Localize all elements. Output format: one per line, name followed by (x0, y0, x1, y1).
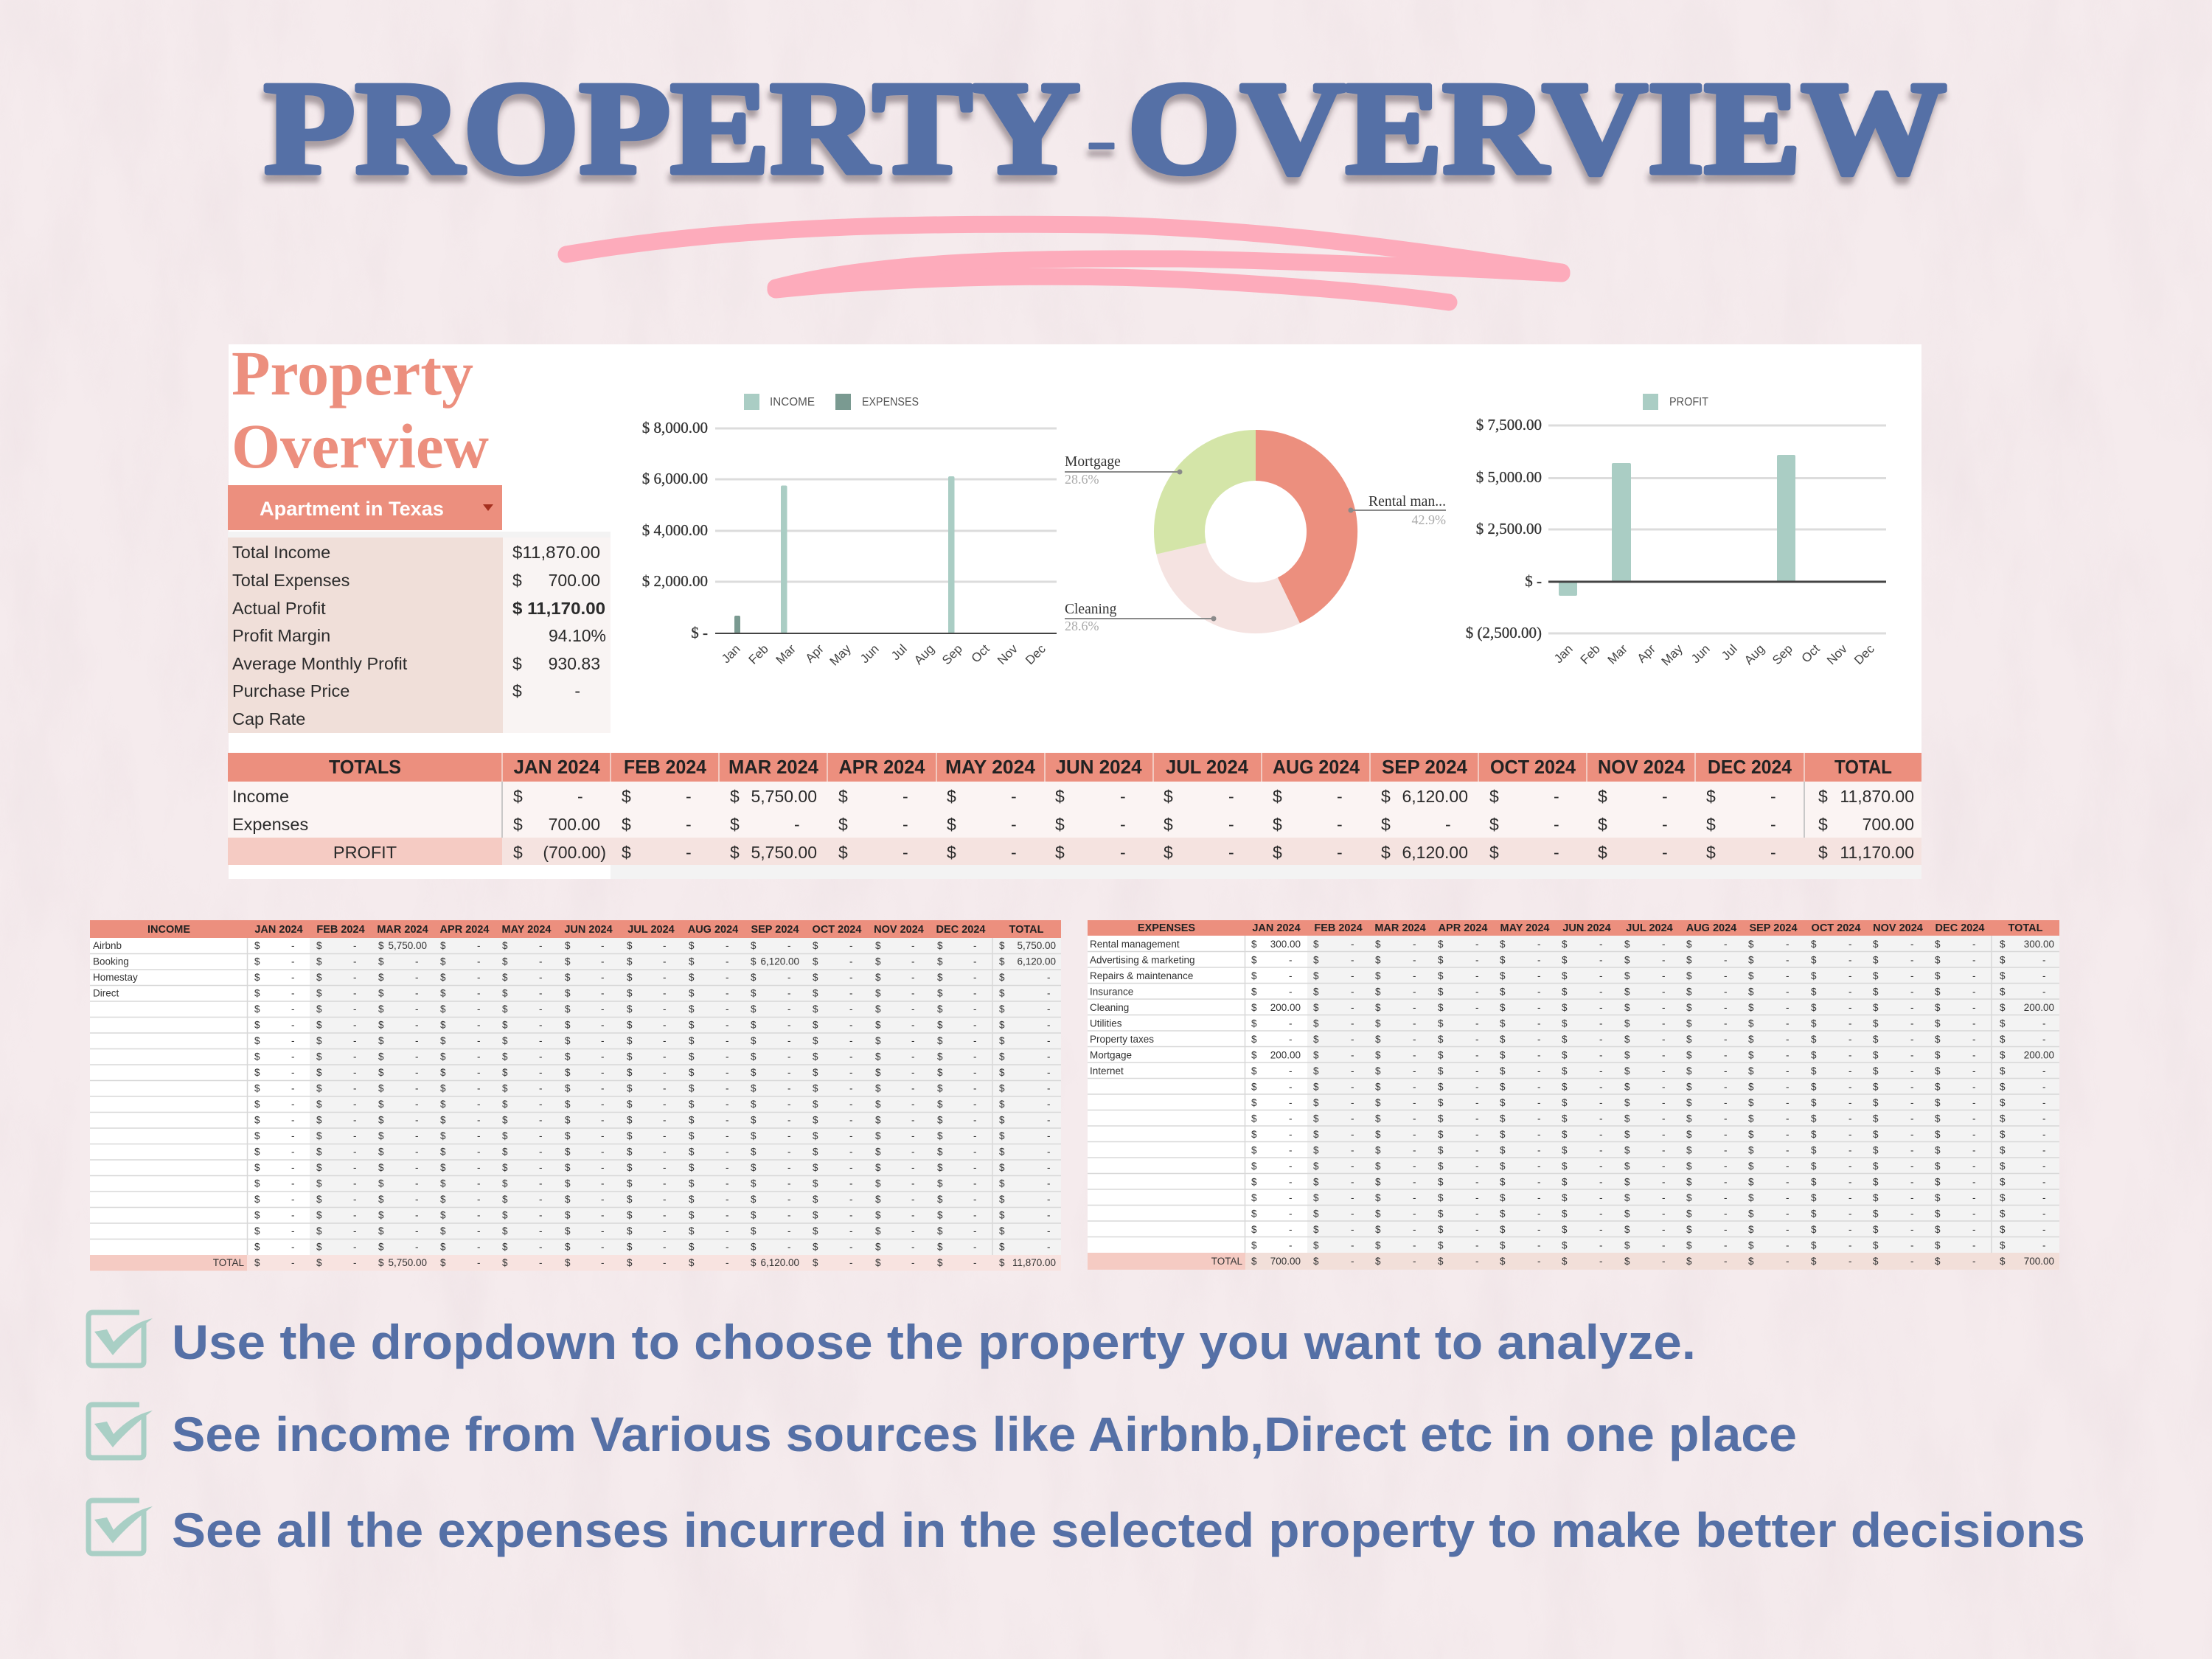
label: Cleaning: 28.6% (1065, 619, 1099, 633)
currency cells: $$-$-$-$-$-$-$-$-$-$-$-$ (1251, 939, 2006, 950)
row: income: 6,120.00 (1402, 787, 1468, 806)
currency cells: $-$-$-$-$-$-$-$-$-$-$-$-$- (1251, 1192, 2045, 1203)
currency cells: 5,750.00 (388, 1257, 427, 1268)
row labels: Utilities (1090, 1018, 1122, 1029)
header row: OCT 2024 (813, 924, 861, 936)
title: OVERVIEW (1127, 55, 1947, 201)
bar chart: profit: $ (2,500.00) (1466, 624, 1542, 641)
currency cells: 700.00 (2024, 1256, 2054, 1267)
row labels: Booking (93, 956, 129, 967)
header row (1138, 922, 2043, 934)
currency cells: $-$-$-$-$-$-$-$-$-$-$-$-$- (1251, 1018, 2045, 1029)
header row: NOV 2024 (874, 924, 924, 936)
bar chart: profit: $ 7,500.00 (1476, 416, 1542, 434)
row labels: Airbnb (93, 940, 122, 951)
bar chart: income vs expenses: Jun (858, 641, 882, 666)
bar chart: profit: Nov (1824, 641, 1850, 667)
row: profit: 6,120.00 (1402, 843, 1468, 862)
currency cells: $-$-$-$-$-$-$-$-$-$-$-$-$- (254, 1035, 1050, 1046)
header row: SEP 2024 (751, 924, 799, 936)
header row: TOTAL (2008, 922, 2043, 934)
donut chart: expenses breakdown (1065, 430, 1446, 633)
bar chart: profit: Oct (1799, 641, 1823, 666)
currency cells: $-$-$-$-$-$-$-$-$-$-$-$-$- (1251, 970, 2045, 981)
legend (1643, 394, 1708, 410)
header row: TOTAL (1009, 924, 1044, 936)
currency cells: $-$-$$-$-$-$-$-$$-$-$-$ (254, 1257, 1005, 1268)
currency cells: $-$-$-$-$-$-$-$-$-$-$-$-$- (1251, 1113, 2045, 1124)
header row: AUG 2024 (1686, 922, 1736, 934)
row: profit: 11,170.00 (1840, 843, 1914, 862)
currency cells: $-$-$-$-$-$-$-$-$-$-$-$-$- (1251, 1208, 2045, 1220)
row: profit: (700.00) (543, 843, 606, 862)
bar chart: profit: Jan (1551, 641, 1576, 666)
dropdown: Apartment in Texas (228, 485, 502, 530)
summary KPI table: $ (512, 654, 522, 673)
currency cells: $-$-$-$-$-$-$-$-$-$-$-$-$- (254, 988, 1050, 998)
header row: FEB 2024 (316, 924, 365, 936)
row labels: TOTAL (1211, 1256, 1242, 1267)
summary KPI table: $11,870.00 (512, 543, 600, 562)
row labels: Property taxes (1090, 1034, 1154, 1045)
header row: JUN 2024 (564, 924, 613, 936)
bullet 1: dropdown: Use the dropdown to choose the property you want to analyze. (172, 1315, 1696, 1369)
header row: MAY 2024 (945, 756, 1036, 778)
decorative pink underline swoosh (566, 224, 1562, 302)
row: income: Income (232, 787, 289, 806)
bar chart: income vs expenses: Oct (969, 641, 992, 666)
header row: EXPENSES (1138, 922, 1195, 934)
row labels: Internet (1090, 1065, 1124, 1077)
currency cells: $-$-$-$-$-$-$-$-$-$-$-$-$- (1251, 1240, 2045, 1251)
label: Rental management: Rental man... (1368, 494, 1446, 509)
currency cells: $-$-$-$-$-$-$-$-$-$-$-$-$- (1251, 1081, 2045, 1093)
row labels: Advertising & marketing (1090, 954, 1195, 966)
row labels: Repairs & maintenance (1090, 970, 1193, 981)
header row: MAR 2024 (377, 924, 428, 936)
icon: checkbox (88, 1500, 153, 1554)
bar chart: profit: $ - (1525, 572, 1542, 590)
bar chart: profit: Mar (1605, 641, 1630, 667)
currency cells: $-$-$-$-$-$-$-$-$-$-$-$-$- (254, 1051, 1050, 1062)
row labels: TOTAL (213, 1257, 244, 1268)
header row: MAY 2024 (502, 924, 551, 936)
bar chart: income vs expenses: Sep (939, 641, 965, 667)
row labels: Homestay (93, 972, 138, 983)
row: income: 11,870.00 (1840, 787, 1914, 806)
header row: DEC 2024 (936, 924, 985, 936)
bar chart: income vs expenses (642, 394, 1057, 669)
currency cells (254, 940, 1056, 1268)
header row: JAN 2024 (254, 924, 303, 936)
row: income: $-$-$$-$-$-$-$-$$-$-$-$ (513, 787, 1828, 806)
header row: MAY 2024 (1500, 922, 1549, 934)
row: expenses: 700.00 (1863, 815, 1914, 834)
currency cells: 200.00 (2024, 1002, 2054, 1013)
legend: EXPENSES (862, 396, 919, 408)
header row: OCT 2024 (1812, 922, 1860, 934)
currency cells: $-$-$$-$-$-$-$-$-$-$-$-$ (254, 940, 1005, 951)
header row: JUN 2024 (1562, 922, 1611, 934)
currency cells: 200.00 (1270, 1050, 1301, 1060)
header row: TOTALS (329, 756, 401, 778)
title: PROPERTY (264, 55, 1080, 201)
currency cells: $-$-$-$-$-$-$-$-$-$-$-$-$- (1251, 1129, 2045, 1140)
row: expenses: 700.00 (549, 815, 600, 834)
summary KPI table: $ (512, 571, 522, 590)
currency cells: $-$-$-$-$-$-$-$-$-$-$-$-$- (254, 1082, 1050, 1094)
currency cells: 200.00 (1270, 1002, 1301, 1013)
header row: APR 2024 (1439, 922, 1487, 934)
bar chart: income vs expenses: Feb (746, 641, 771, 667)
bar chart: profit: Feb (1578, 641, 1603, 667)
currency cells: 6,120.00 (1017, 956, 1056, 967)
currency cells: $-$-$-$-$-$-$-$-$-$-$-$-$- (1251, 1161, 2045, 1172)
header row: JUL 2024 (1166, 756, 1249, 778)
label: Cleaning: Cleaning (1065, 602, 1117, 617)
currency cells: $-$-$-$-$-$-$-$-$-$-$-$-$- (254, 1209, 1050, 1221)
bar chart: profit: May (1659, 641, 1686, 669)
header row: NOV 2024 (1598, 756, 1686, 778)
header row: APR 2024 (839, 756, 925, 778)
currency cells: $-$-$-$-$-$-$-$-$-$-$-$-$- (254, 1146, 1050, 1158)
row labels: Insurance (1090, 987, 1133, 997)
row labels (1090, 939, 1242, 1267)
header row: JUN 2024 (1055, 756, 1142, 778)
bar chart: income vs expenses: Dec (1023, 641, 1048, 667)
row labels: Direct (93, 988, 119, 998)
summary KPI table: 94.10% (549, 626, 606, 645)
row: expenses: Expenses (232, 815, 308, 834)
legend: PROFIT (1669, 396, 1708, 408)
bar chart: income vs expenses: May (827, 641, 854, 669)
summary KPI table: 930.83 (549, 654, 600, 673)
currency cells: 200.00 (2024, 1050, 2054, 1060)
bar chart: profit: $ 2,500.00 (1476, 520, 1542, 538)
summary KPI table: Purchase Price (232, 681, 349, 700)
header row: INCOME (147, 924, 190, 936)
header row (147, 924, 1044, 936)
bar chart: profit: Apr (1635, 641, 1658, 666)
header row: MAR 2024 (728, 756, 819, 778)
summary KPI table: Profit Margin (232, 626, 330, 645)
currency cells: $-$-$-$-$-$-$-$-$-$-$-$-$- (1251, 1177, 2045, 1187)
currency cells: 11,870.00 (1012, 1257, 1056, 1268)
label: Mortgage: Mortgage (1065, 454, 1121, 470)
row labels: Mortgage (1090, 1050, 1132, 1060)
label: Mortgage: 28.6% (1065, 472, 1099, 487)
panel: dashboard sheet (228, 338, 1921, 879)
heading: Property Overview: Property (232, 338, 473, 408)
header row: AUG 2024 (688, 924, 738, 936)
currency cells: $-$-$-$-$-$-$-$-$-$-$-$-$- (254, 1242, 1050, 1252)
currency cells: $-$-$-$-$-$-$-$-$-$-$-$-$- (254, 1225, 1050, 1237)
bar chart: profit (1466, 394, 1886, 669)
currency cells: $-$-$-$-$-$-$-$-$-$-$-$-$- (1251, 1144, 2045, 1156)
currency cells: 5,750.00 (388, 940, 427, 951)
header row: AUG 2024 (1273, 756, 1360, 778)
row: expenses: $$-$-$-$-$-$-$-$-$-$-$-$ (513, 815, 1828, 834)
currency cells: $-$-$-$-$-$-$-$-$-$-$-$-$- (254, 1099, 1050, 1110)
row: profit: $$-$$-$-$-$-$-$$-$-$-$ (513, 843, 1828, 862)
bar chart: income vs expenses: $ 8,000.00 (642, 419, 708, 437)
header row: DEC 2024 (1708, 756, 1792, 778)
row labels: Rental management (1090, 939, 1180, 950)
row: income: 5,750.00 (751, 787, 817, 806)
summary KPI table: $ (512, 681, 522, 700)
header row: FEB 2024 (1314, 922, 1363, 934)
header row: DEC 2024 (1935, 922, 1984, 934)
header row: JAN 2024 (1252, 922, 1301, 934)
summary KPI table: Actual Profit (232, 599, 326, 618)
heading: Property Overview (232, 338, 489, 481)
currency cells: $$-$-$-$-$-$-$-$-$-$-$-$ (1251, 1050, 2006, 1060)
bar chart: income vs expenses: Nov (995, 641, 1020, 667)
bar chart: profit: Sep (1770, 641, 1795, 667)
header row: FEB 2024 (624, 756, 707, 778)
currency cells: $-$-$-$-$-$-$-$-$-$-$-$-$- (254, 1019, 1050, 1031)
currency cells: 5,750.00 (1017, 940, 1056, 951)
summary KPI table: Total Expenses (232, 571, 349, 590)
header row: TOTAL (1834, 756, 1892, 778)
currency cells: $-$-$-$-$-$-$-$-$-$-$-$-$- (254, 1130, 1050, 1141)
header row: JAN 2024 (513, 756, 600, 778)
header row: APR 2024 (440, 924, 489, 936)
header row (329, 756, 1892, 778)
currency cells: $-$-$-$-$-$-$-$-$-$-$-$-$- (1251, 987, 2045, 997)
currency cells: $-$-$-$-$-$-$-$-$-$-$-$-$- (1251, 1097, 2045, 1108)
bar chart: profit: Dec (1851, 641, 1877, 667)
currency cells: $$-$-$-$-$-$-$-$-$-$-$-$ (1251, 1256, 2006, 1267)
currency cells: $$-$-$-$-$-$-$-$-$-$-$-$ (1251, 1002, 2006, 1013)
bar chart: income vs expenses: $ 2,000.00 (642, 572, 708, 590)
table: monthly totals (228, 753, 1921, 879)
currency cells: $-$-$-$-$-$-$-$-$-$-$-$-$- (1251, 954, 2045, 966)
bar chart: income vs expenses: $ 4,000.00 (642, 521, 708, 539)
currency cells (1251, 939, 2054, 1267)
bar chart: income vs expenses: Mar (773, 641, 799, 667)
label: Cleaning (1065, 602, 1217, 633)
legend (744, 394, 919, 410)
currency cells: $-$-$-$-$-$-$-$-$-$-$-$-$- (254, 1115, 1050, 1125)
bar chart: profit: Aug (1742, 641, 1767, 667)
header row: NOV 2024 (1873, 922, 1923, 934)
currency cells: 300.00 (2024, 939, 2054, 950)
title (264, 55, 1947, 201)
label: Rental management (1348, 494, 1446, 527)
currency cells: $-$-$-$-$-$-$-$-$-$-$-$-$- (254, 1178, 1050, 1189)
heading: Property Overview: Overview (232, 411, 489, 481)
icon: checkbox (88, 1312, 153, 1366)
summary KPI table: Average Monthly Profit (232, 654, 408, 673)
row labels: Cleaning (1090, 1002, 1129, 1013)
bullet 2: income sources: See income from Various sources like Airbnb,Direct etc in one place (172, 1407, 1797, 1461)
bar chart: profit: Jul (1719, 641, 1740, 663)
currency cells: $-$-$-$-$-$-$-$-$-$-$-$-$- (1251, 1224, 2045, 1235)
currency cells: 6,120.00 (760, 956, 799, 967)
header row: SEP 2024 (1382, 756, 1468, 778)
summary KPI table: 700.00 (549, 571, 600, 590)
bar chart: income vs expenses: $ 6,000.00 (642, 470, 708, 487)
summary KPI table: Total Income (232, 543, 330, 562)
icon: checkbox (88, 1405, 153, 1458)
header row: SEP 2024 (1749, 922, 1798, 934)
currency cells: 6,120.00 (760, 1257, 799, 1268)
currency cells: $-$-$-$-$-$-$-$-$-$-$-$-$- (254, 1004, 1050, 1015)
bar chart: income vs expenses: Jan (719, 641, 743, 666)
bar chart: income vs expenses: Jul (888, 641, 910, 663)
header row: JUL 2024 (627, 924, 675, 936)
label: Mortgage (1065, 454, 1183, 487)
table: expense categories (1088, 920, 2059, 1270)
currency cells: $-$-$-$-$-$-$-$-$-$-$-$-$- (254, 1194, 1050, 1205)
table: income sources (90, 920, 1061, 1271)
summary KPI table (228, 532, 611, 733)
currency cells: $-$-$-$-$-$-$-$-$-$-$-$-$- (1251, 1065, 2045, 1077)
currency cells: 700.00 (1270, 1256, 1301, 1267)
label: Rental management: 42.9% (1411, 512, 1446, 527)
currency cells: $-$-$-$-$-$-$-$-$-$-$-$-$- (254, 1067, 1050, 1078)
header row: OCT 2024 (1490, 756, 1576, 778)
bar chart: profit: $ 5,000.00 (1476, 468, 1542, 486)
bullet 3: expenses: See all the expenses incurred in the selected property to make better decisions (172, 1503, 2085, 1557)
bar chart: income vs expenses: Aug (911, 641, 937, 667)
currency cells: $-$-$-$-$-$-$-$-$-$-$-$-$- (254, 1162, 1050, 1173)
bar chart: profit: Jun (1688, 641, 1713, 666)
row labels (93, 940, 244, 1268)
row: profit: 5,750.00 (751, 843, 817, 862)
summary KPI table: Cap Rate (232, 709, 305, 728)
summary KPI table: $ 11,170.00 (512, 599, 605, 618)
header row: MAR 2024 (1374, 922, 1426, 934)
currency cells: $-$-$-$-$-$-$-$-$$-$-$-$ (254, 956, 1005, 967)
bar chart: income vs expenses: Apr (803, 641, 827, 666)
summary KPI table: - (574, 681, 580, 700)
header row: JUL 2024 (1626, 922, 1673, 934)
dropdown: Apartment in Texas: Apartment in Texas (260, 498, 444, 520)
currency cells: $-$-$-$-$-$-$-$-$-$-$-$-$- (1251, 1034, 2045, 1045)
bar chart: income vs expenses: $ - (691, 624, 708, 641)
legend: INCOME (770, 396, 815, 408)
currency cells: 300.00 (1270, 939, 1301, 950)
row: profit: PROFIT (333, 843, 397, 862)
currency cells: $-$-$-$-$-$-$-$-$-$-$-$-$- (254, 972, 1050, 983)
